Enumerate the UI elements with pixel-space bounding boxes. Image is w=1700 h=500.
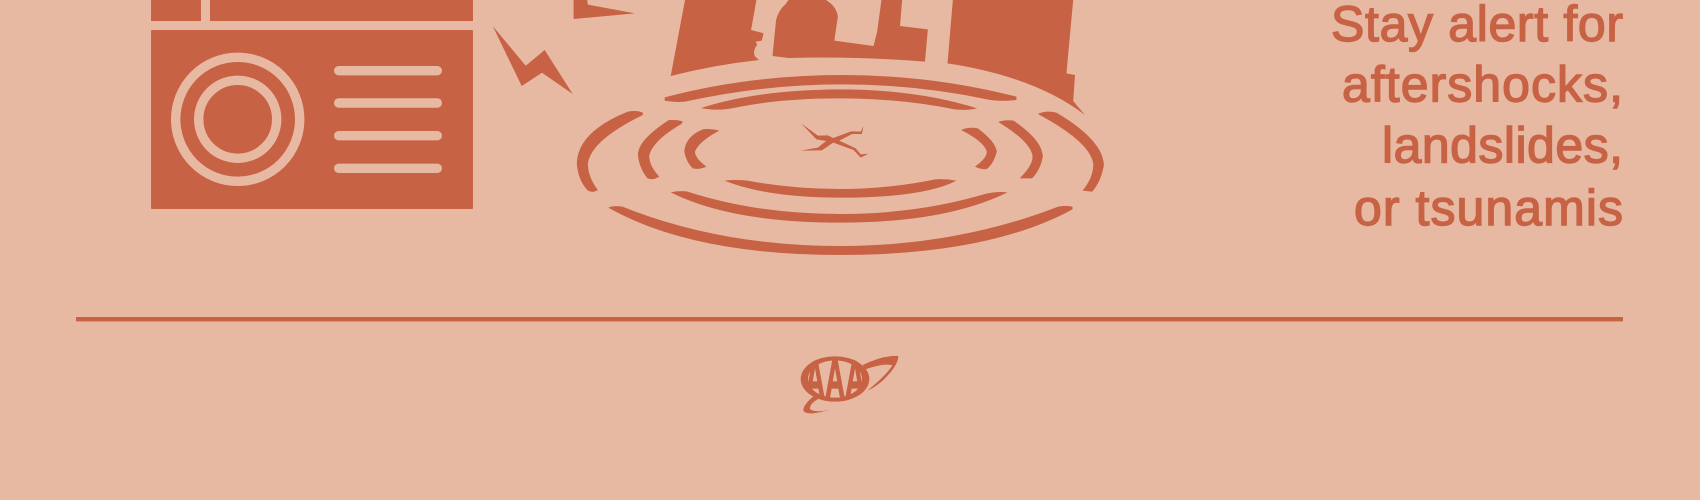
logo: AAA: AAA [805,347,865,409]
text block: safety tip [1331,0,1623,236]
text block: safety tip: aftershocks, [1342,57,1623,113]
icon: lightning bolt [493,26,573,94]
text block: safety tip: or tsunamis [1354,180,1623,236]
text block: safety tip: landslides, [1382,118,1623,174]
icon: earthquake scene with collapsing buildings and shock rings [574,0,1104,255]
logo: AAA [800,356,898,414]
icon: emergency radio [151,0,473,209]
divider rule [76,317,1623,321]
